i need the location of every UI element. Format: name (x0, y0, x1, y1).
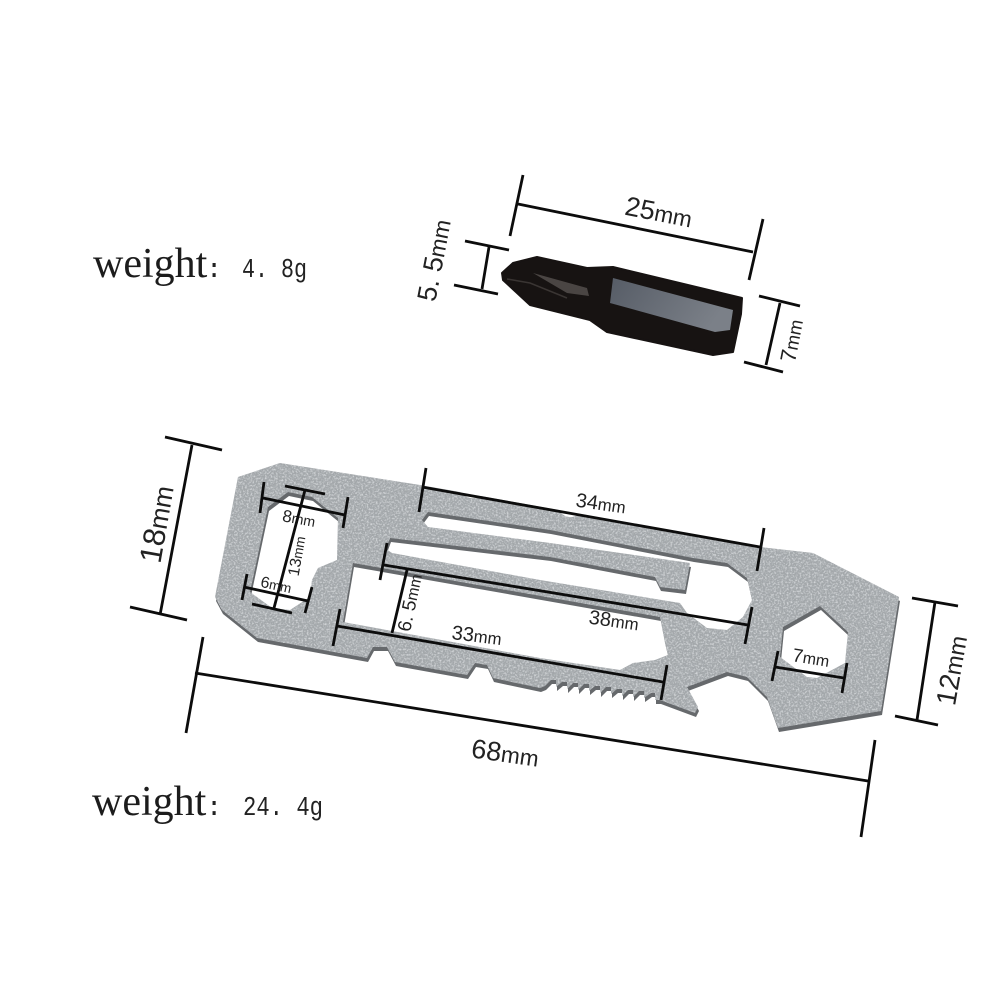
dimension: bit 25mm: 25mm (623, 191, 695, 233)
dimension: 12mm (895, 598, 973, 725)
dimension: 13mm (252, 486, 325, 613)
dimension: bit 5.5mm (412, 217, 509, 304)
dimension: 38mm (380, 543, 752, 644)
dimension: 6.5mm: 6. 5mm (394, 572, 427, 634)
dimension: 33mm: 33mm (450, 622, 503, 650)
screwdriver bit (502, 257, 742, 355)
label: bit weight: 4. 8g (242, 256, 307, 286)
dimension: 12mm: 12mm (930, 633, 973, 708)
dimension: 18mm: 18mm (133, 483, 181, 566)
label: tool weight: weight (92, 779, 207, 825)
dimension: 6mm: 6mm (259, 574, 293, 597)
dimension: 68mm (186, 637, 875, 837)
label: bit weight (93, 241, 307, 287)
dimension: 34mm (419, 468, 764, 571)
label: tool weight: : (206, 794, 222, 824)
dimension: bit 25mm (510, 175, 763, 280)
dimension: bit 5.5mm: 5. 5mm (412, 217, 457, 304)
dimension: 18mm (130, 437, 222, 620)
dimension: hex 7mm (772, 645, 847, 693)
label: bit weight: : (206, 256, 222, 286)
dimension: 13mm: 13mm (286, 535, 309, 577)
dimension: 8mm: 8mm (281, 506, 317, 531)
dimension: hex 7mm: 7mm (791, 645, 831, 672)
label: tool weight: 24. 4g (243, 794, 323, 824)
label: bit weight: weight (93, 241, 208, 287)
multi-tool body (215, 463, 900, 732)
dimension: bit 7mm (744, 296, 808, 372)
label: tool weight (92, 779, 323, 825)
dimension: 8mm (260, 482, 348, 531)
dimension: 33mm (333, 609, 667, 700)
dimension: 34mm: 34mm (574, 490, 627, 518)
dimension: 68mm: 68mm (470, 734, 541, 773)
dimension: bit 7mm: 7mm (775, 317, 808, 364)
dimension: 6mm (242, 574, 312, 613)
dimension: 38mm: 38mm (587, 607, 640, 635)
